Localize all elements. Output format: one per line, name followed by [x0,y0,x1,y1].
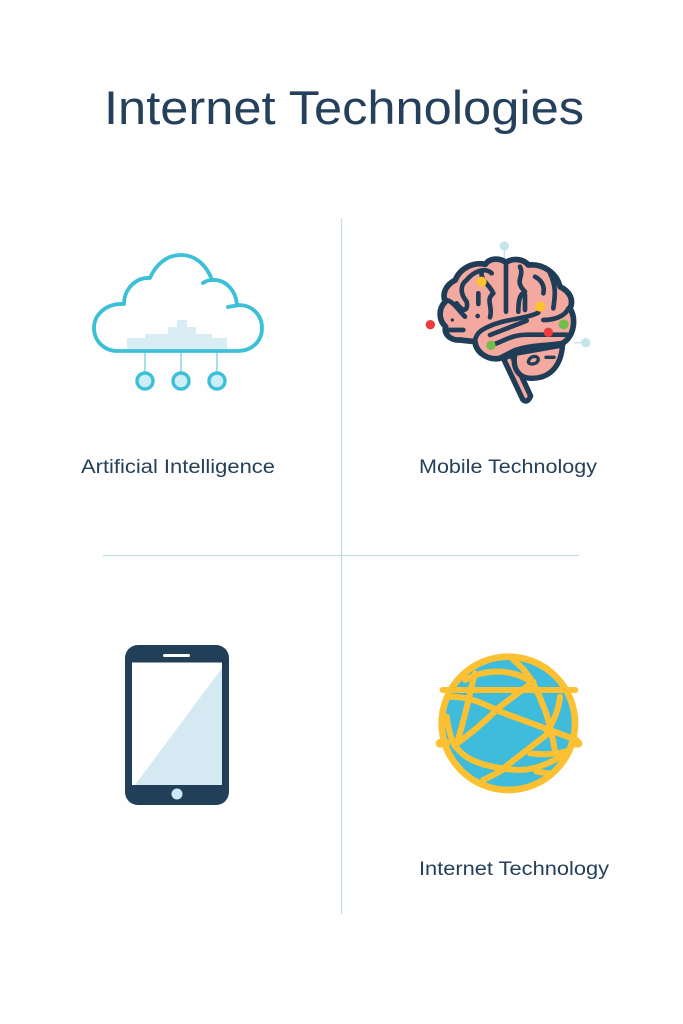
panel: artificial intelligence [81,255,275,478]
panel: smartphone [125,645,229,805]
icon: cloud network [94,255,262,389]
icon: globe [440,657,578,790]
label: artificial intelligence: Artificial Intelligence [81,457,275,478]
panel: internet technology [419,657,610,880]
icon: brain [426,241,590,401]
label: internet technology: Internet Technology [419,859,610,880]
title: Internet Technologies [104,81,584,134]
label: mobile technology: Mobile Technology [419,457,598,478]
icon: smartphone [125,645,229,805]
panel: mobile technology [419,241,598,478]
